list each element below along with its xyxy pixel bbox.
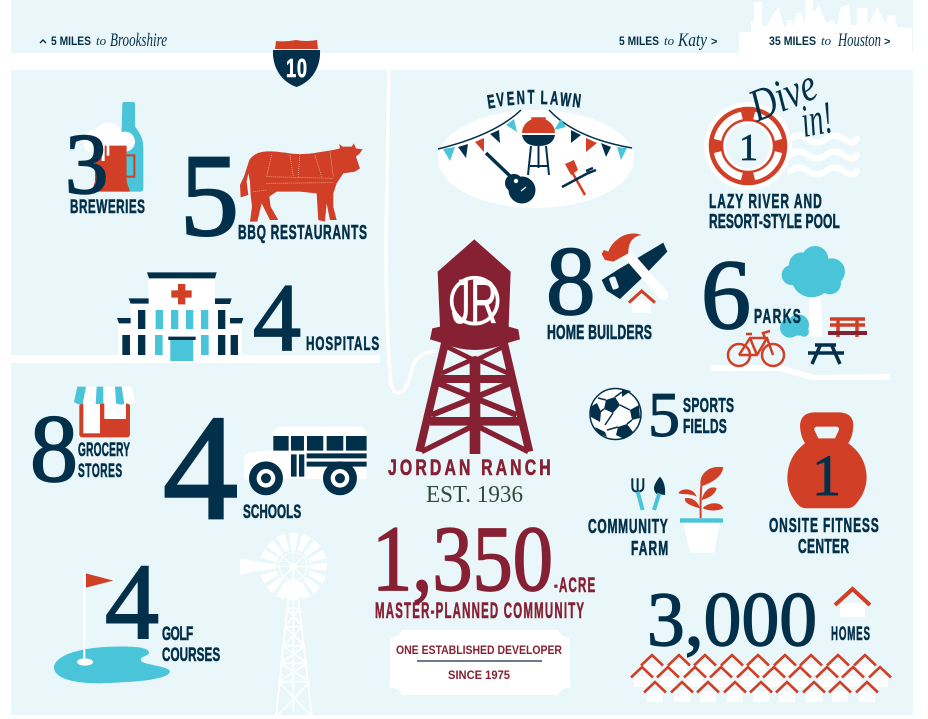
label: RESORT-STYLE POOL <box>709 211 840 233</box>
script: Dive in!: Dive <box>741 59 824 132</box>
label: SCHOOLS <box>243 501 301 523</box>
direction: Katy: 5 MILES <box>619 36 659 48</box>
icon: beer bottle and mug <box>84 102 143 192</box>
label <box>588 516 668 560</box>
label <box>683 395 734 438</box>
icon: water tower <box>419 239 529 454</box>
number 1: 1 <box>739 127 758 169</box>
number 3,000: 3,000 <box>647 576 817 662</box>
label: SPORTS <box>683 395 734 417</box>
curved heading: N <box>571 91 582 112</box>
golf stat <box>54 543 220 683</box>
icon: hospital <box>117 272 243 361</box>
label: GROCERY <box>78 440 130 461</box>
number 1,350: 1,350 <box>372 508 553 611</box>
number 8: 8 <box>30 395 78 502</box>
event lawn <box>438 88 634 208</box>
script: Dive in!: in! <box>797 91 836 147</box>
water tower logo <box>388 239 551 508</box>
icon: soccer ball <box>590 388 641 440</box>
subheading: MASTER-PLANNED COMMUNITY <box>375 598 584 623</box>
curved heading: V <box>496 90 506 111</box>
monogram: JR <box>452 267 497 336</box>
direction: Brookshire <box>40 30 167 51</box>
icon: spatula and fork <box>562 160 596 195</box>
bunting <box>438 110 632 161</box>
interstate 10 shield <box>273 40 320 87</box>
community farm stat <box>588 467 723 560</box>
interstate 10 shield: 10 <box>286 54 307 83</box>
fitness stat <box>769 412 879 558</box>
direction: Houston: 35 MILES <box>769 36 816 48</box>
direction: Katy: Katy <box>677 30 707 51</box>
curved heading: A <box>550 89 559 110</box>
parks stat <box>701 239 867 366</box>
direction: Houston <box>769 30 890 51</box>
direction: Katy <box>619 30 717 51</box>
park path <box>710 365 890 380</box>
number 4: 4 <box>163 385 238 551</box>
acreage stat <box>372 508 595 623</box>
icon: grill <box>522 118 555 175</box>
label: FARM <box>631 538 668 560</box>
curved heading: T <box>528 88 535 108</box>
curved heading: E <box>506 89 515 110</box>
icon: cow <box>240 143 363 222</box>
curved heading: N <box>516 88 525 109</box>
icon: bench <box>828 318 867 337</box>
number 8: 8 <box>546 227 596 336</box>
since text: SINCE 1975 <box>448 668 510 682</box>
label: HOMES <box>831 624 870 645</box>
label: STORES <box>78 461 122 482</box>
builders stat <box>546 227 667 344</box>
icon: house <box>835 589 870 617</box>
BBQ stat <box>180 130 367 261</box>
label: PARKS <box>754 306 801 328</box>
label <box>769 515 879 558</box>
label: ONSITE FITNESS <box>769 515 879 537</box>
number 3: 3 <box>65 115 108 212</box>
label: BBQ RESTAURANTS <box>238 222 367 244</box>
winding road <box>386 69 436 393</box>
label: HOSPITALS <box>306 333 379 355</box>
direction: Brookshire: 5 MILES <box>51 36 91 48</box>
icon: garden tools <box>632 477 665 510</box>
curved heading <box>486 88 582 113</box>
pool stat <box>704 59 857 233</box>
icon: life ring <box>704 102 792 190</box>
acre suffix: -ACRE <box>554 573 595 597</box>
icon: picnic table <box>808 345 844 364</box>
side road <box>11 355 380 363</box>
direction: Brookshire: Brookshire <box>110 30 167 51</box>
curved heading: W <box>559 90 572 111</box>
number 6: 6 <box>701 239 751 350</box>
windmill silhouette <box>240 537 323 717</box>
icon: golf green and flag <box>54 573 170 683</box>
white ellipse <box>438 110 634 208</box>
waves <box>790 136 857 174</box>
icon: kettlebell <box>787 412 867 508</box>
highway road <box>11 53 913 70</box>
label: COMMUNITY <box>588 516 668 538</box>
number 4: 4 <box>105 543 159 662</box>
icon: storefront <box>74 387 135 437</box>
developer plaque <box>390 630 570 695</box>
icon: guitar <box>486 153 536 204</box>
icon: school bus <box>244 427 367 495</box>
icon: bicycle <box>728 331 784 366</box>
curved heading: L <box>540 88 548 109</box>
sports stat <box>590 379 734 450</box>
direction: Brookshire: to <box>96 33 107 48</box>
number 1: 1 <box>812 443 841 508</box>
label: LAZY RIVER AND <box>709 191 822 213</box>
plaque shape <box>390 630 570 695</box>
label: GOLF <box>162 623 193 645</box>
name: JORDAN RANCH <box>388 457 551 481</box>
label: COURSES <box>162 644 220 666</box>
rows of houses <box>631 655 891 702</box>
label: BREWERIES <box>70 196 145 218</box>
breweries stat <box>65 102 145 218</box>
number 4: 4 <box>253 264 301 371</box>
icon: potted plant <box>678 467 723 553</box>
direction: Houston: > <box>884 36 890 48</box>
direction: Katy: to <box>664 33 675 48</box>
icon: tree <box>780 246 845 338</box>
direction: Katy: > <box>711 36 717 48</box>
icon: saw, hammer and house <box>602 234 667 313</box>
grocery stat <box>30 387 135 502</box>
direction: Houston: Houston <box>837 30 881 51</box>
label: HOME BUILDERS <box>547 321 652 344</box>
homes stat <box>631 576 891 702</box>
hospitals stat <box>117 264 379 371</box>
established: EST. 1936 <box>426 482 523 508</box>
direction: Houston: to <box>821 33 832 48</box>
label <box>78 440 130 482</box>
label <box>162 623 220 666</box>
label <box>709 191 840 233</box>
number 5: 5 <box>648 379 680 450</box>
label: FIELDS <box>683 416 727 438</box>
developer text: ONE ESTABLISHED DEVELOPER <box>396 643 562 657</box>
schools stat <box>163 385 367 551</box>
label: CENTER <box>798 536 849 558</box>
number 5: 5 <box>180 130 239 261</box>
curved heading: E <box>486 92 496 113</box>
Houston skyline <box>739 0 912 55</box>
